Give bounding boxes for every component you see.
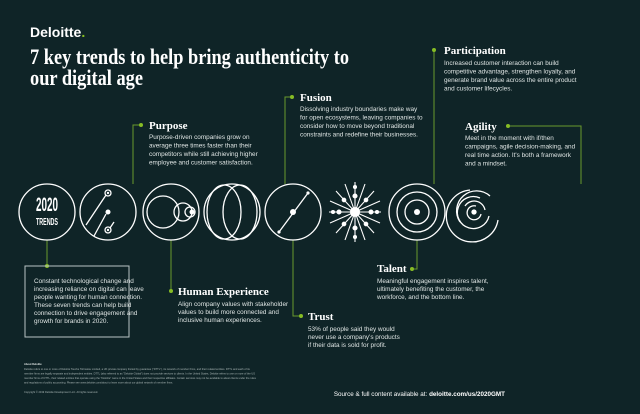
- text: trust: if their data is sold for profit.: [308, 342, 387, 349]
- intro box: growth for brands in 2020.: [34, 318, 108, 325]
- intro box: These seven trends can help build: [34, 302, 132, 309]
- text: purpose: Purpose-driven companies grow on: [149, 134, 250, 141]
- icon: talent: [389, 184, 445, 240]
- text: agility: Agility: [465, 121, 497, 133]
- title: 7 key trends to help bring authenticity to: [30, 44, 349, 69]
- text: human experience: Human Experience: [178, 286, 269, 298]
- title: our digital age: [30, 65, 143, 90]
- text: trust: 53% of people said they would: [308, 326, 395, 333]
- footer: about: About Deloitte: [24, 362, 42, 366]
- text: talent: Meaningful engagement inspires talent,: [377, 278, 489, 285]
- text: trust: [308, 311, 400, 349]
- text: talent: ultimately benefiting the customer, the: [377, 286, 485, 293]
- text: purpose: average three times faster than their: [149, 142, 253, 150]
- text: purpose: employee and customer satisfaction.: [149, 160, 253, 166]
- icon: 2020 trends: 2020: [36, 195, 58, 216]
- icon: purpose: [80, 184, 136, 240]
- icon: 2020 trends: [19, 184, 75, 240]
- text: trust: never use a company's products: [308, 334, 400, 341]
- text: purpose: [149, 120, 259, 166]
- footer: about: [24, 362, 257, 394]
- icon: agility: [446, 190, 498, 242]
- text: human experience: inclusive human experiences.: [178, 317, 262, 324]
- text: fusion: Dissolving industry boundaries make way: [300, 106, 418, 113]
- text: fusion: [300, 92, 423, 138]
- text: talent: [376, 263, 489, 301]
- footer: about: Deloitte refers to one or more of Deloitte Touche Tohmatsu Limited, a UK private company limited by guarantee ("DTTL"), its network of member firms, and their related entities. DTTL and each of its: [24, 367, 251, 371]
- text: participation: competitive advantage, strengthen loyalty, and: [444, 68, 576, 76]
- text: agility: [465, 121, 576, 168]
- intro box: people wanting for human connection.: [34, 294, 142, 301]
- icon: participation: [329, 182, 381, 242]
- text: fusion: for open ecosystems, leaving companies to: [300, 114, 423, 122]
- logo: Deloitte.: [30, 24, 85, 40]
- footer: about: and regulations of public accounting. Please see www.deloitte.com/about to learn more about our global network of member firms.: [24, 380, 173, 384]
- text: purpose: Purpose: [149, 120, 188, 132]
- text: fusion: Fusion: [300, 92, 332, 104]
- text: participation: Increased customer interaction can build: [444, 60, 559, 67]
- footer: about: member firms are legally separate and independent entities. DTTL (also referred to as "Deloitte Global") does not provide services to clients. In the United States, Deloitte refers to one or more of the US: [24, 372, 255, 376]
- intro box: Constant technological change and: [34, 278, 134, 285]
- text: fusion: consider how to move beyond traditional: [300, 123, 414, 130]
- text: talent: Talent: [377, 263, 407, 275]
- text: purpose: competitors while still achieving higher: [149, 151, 259, 158]
- footer: source: Source & full content available at: deloitte.com/us/2020GMT: [334, 391, 505, 398]
- text: participation: generate brand value across the entire product: [444, 77, 577, 84]
- title: [30, 44, 349, 90]
- text: talent: workforce, and the bottom line.: [376, 294, 465, 301]
- text: fusion: constraints and redefine their businesses.: [300, 132, 418, 138]
- text: agility: Meet in the moment with if/then: [465, 135, 554, 142]
- icon: 2020 trends: TRENDS: [36, 217, 58, 228]
- intro box: connection to drive engagement and: [34, 310, 138, 317]
- text: participation: and customer lifecycles.: [444, 86, 512, 92]
- text: trust: Trust: [308, 311, 334, 323]
- intro box: increasing reliance on digital can leave: [34, 286, 144, 293]
- icon: trust: [265, 184, 321, 240]
- footer: about: member firms of DTTL, their related entities that operate using the "Deloitte" name in the United States and their respective affiliates. Certain services may not be available to attest clients under the rules: [24, 376, 257, 380]
- dots: [45, 48, 510, 318]
- icon: human experience: [143, 184, 199, 240]
- text: participation: [444, 45, 577, 92]
- text: human experience: [178, 286, 289, 324]
- footer: about: Copyright © 2019 Deloitte Development LLC. All rights reserved.: [24, 390, 98, 394]
- text: human experience: values to build more connected and: [178, 309, 279, 316]
- text: agility: and a mindset.: [465, 160, 507, 168]
- text: agility: real time action. It's both a framework: [465, 152, 572, 159]
- text: participation: Participation: [444, 45, 506, 57]
- text: human experience: Align company values with stakeholder: [178, 301, 289, 308]
- intro box: [25, 266, 144, 337]
- connector lines: [47, 50, 581, 316]
- text: agility: campaigns, agile decision-making, and: [465, 144, 576, 150]
- icon: fusion: [204, 184, 260, 240]
